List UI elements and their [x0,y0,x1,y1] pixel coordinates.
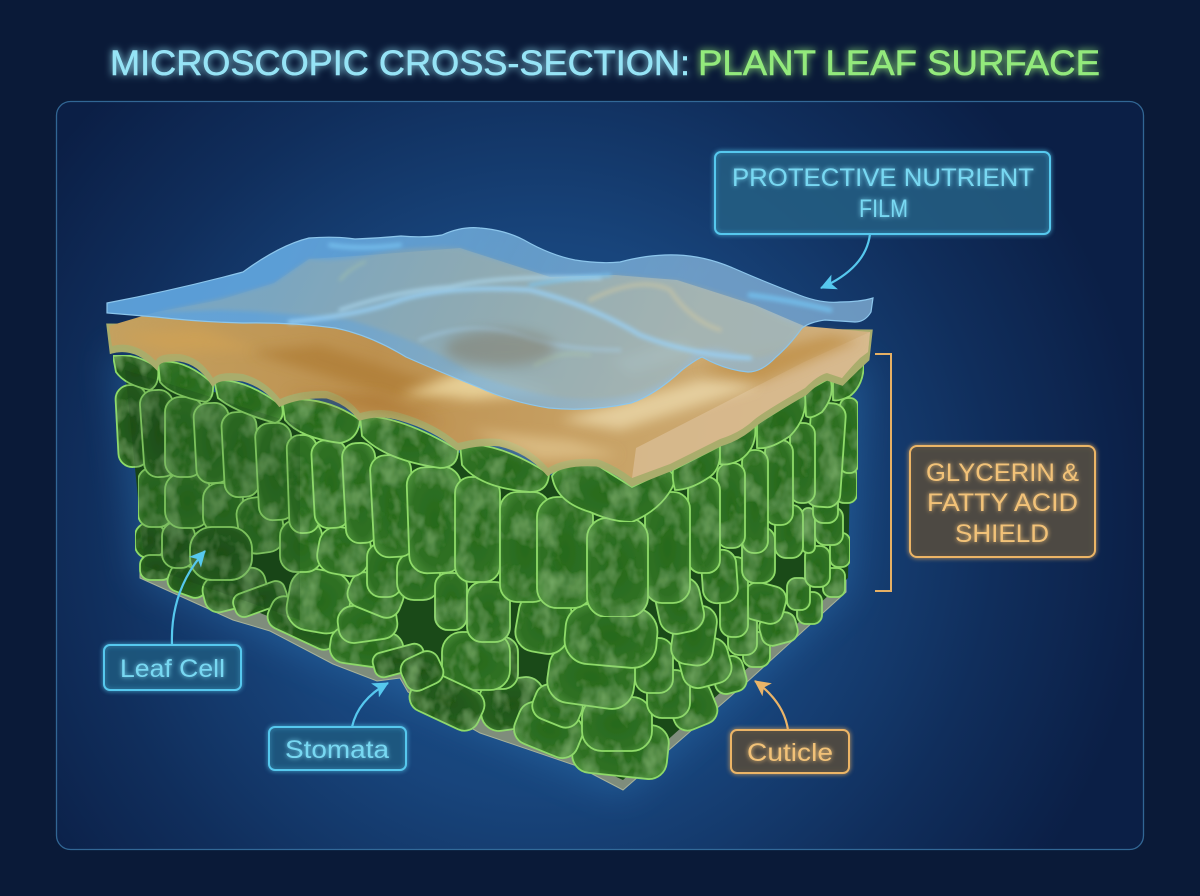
title: MICROSCOPIC CROSS-SECTION: [110,44,690,83]
label: cuticle [731,730,849,773]
callout box [104,645,241,690]
arrow: film label to film [821,234,870,288]
arrow: stomata [352,683,388,727]
callout text: PROTECTIVE NUTRIENT [732,164,1034,192]
arrow: leaf cell [172,551,205,645]
amber highlights [115,328,860,460]
panel: main frame [56,102,1144,850]
callout text: Leaf Cell [120,655,225,683]
amber glycerin shield layer [109,248,870,484]
callout text [926,459,1079,548]
callout text: Cuticle [747,739,833,767]
spongy lower cell layer [135,522,850,781]
amber right bevel [632,332,870,478]
callout text: FATTY ACID [927,489,1078,517]
film body [107,228,873,409]
amber top face [109,248,870,478]
callout text: GLYCERIN & [926,459,1079,487]
amber scalloped rim [109,326,870,484]
callout text: Stomata [285,736,389,764]
callout box [731,730,849,773]
arrow: cuticle [755,681,788,730]
callout text: FILM [859,195,908,223]
title: PLANT LEAF SURFACE [698,44,1100,83]
middle cell layer [138,467,857,670]
protective nutrient film [107,228,873,409]
callout box [910,446,1095,557]
cuticle underside membrane [140,572,846,790]
label: stomata [269,727,406,770]
callout text [732,164,1034,223]
palisade cell layer [115,384,858,617]
label: leaf cell [104,645,241,690]
upper epidermis cells [113,355,864,522]
callout text: SHIELD [955,520,1049,548]
label: glycerin and fatty acid shield [910,446,1095,557]
film dark patch [445,330,555,366]
glow behind leaf [110,350,866,795]
left face shading [125,370,300,620]
callout box [269,727,406,770]
bracket: shield [875,354,891,591]
film inner surface [156,247,804,399]
film ripples [290,245,830,365]
label: protective nutrient film [715,152,1050,234]
title [110,44,1100,83]
leaf block illustration [107,228,873,795]
callout box [715,152,1050,234]
cell backing [125,370,852,780]
